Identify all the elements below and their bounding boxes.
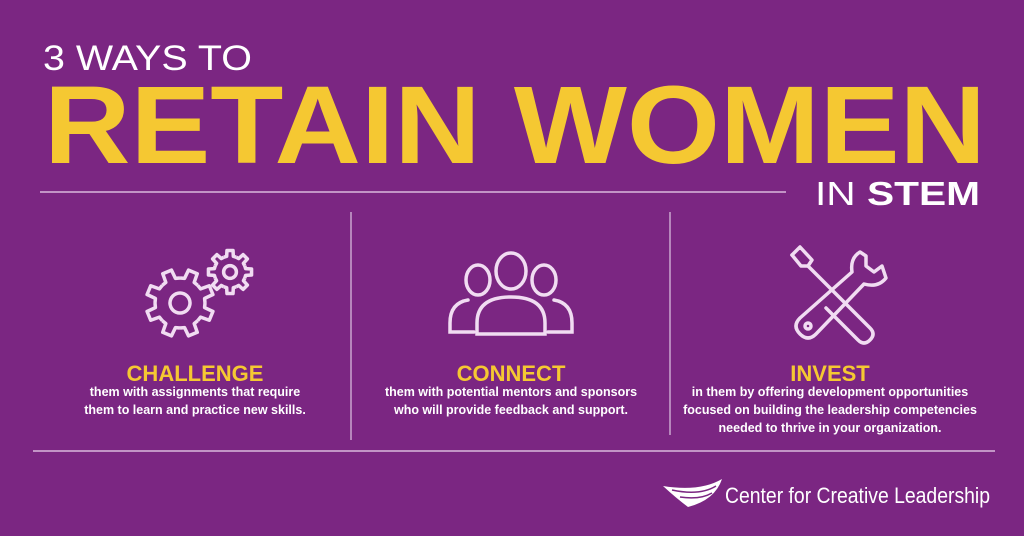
icon: gears (136, 250, 252, 347)
text: invest body: focused on building the leadership competencies (683, 403, 977, 417)
heading: challenge: CHALLENGE (127, 361, 263, 386)
heading: invest: INVEST (790, 361, 870, 386)
icon: tools (792, 247, 886, 343)
text: challenge body: them to learn and practice new skills. (84, 403, 306, 417)
panel: invest (683, 247, 977, 435)
text: challenge body: them with assignments that require (90, 385, 300, 399)
text: connect body: who will provide feedback and support. (393, 403, 628, 417)
panel: challenge (84, 250, 306, 417)
text: connect body: them with potential mentors and sponsors (385, 385, 637, 399)
logo: center for creative leadership (663, 479, 990, 508)
title: in stem: IN STEM (815, 175, 980, 212)
text: invest body: in them by offering development opportunities (692, 385, 968, 399)
text: invest body: needed to thrive in your organization. (719, 421, 941, 435)
panel: connect (385, 253, 637, 417)
subtitle: 3 ways to: 3 WAYS TO (43, 39, 252, 78)
title: retain women: RETAIN WOMEN (44, 64, 986, 187)
icon: people (450, 253, 572, 334)
heading: connect: CONNECT (457, 361, 566, 386)
logo: center for creative leadership: Center for Creative Leadership (725, 483, 990, 508)
